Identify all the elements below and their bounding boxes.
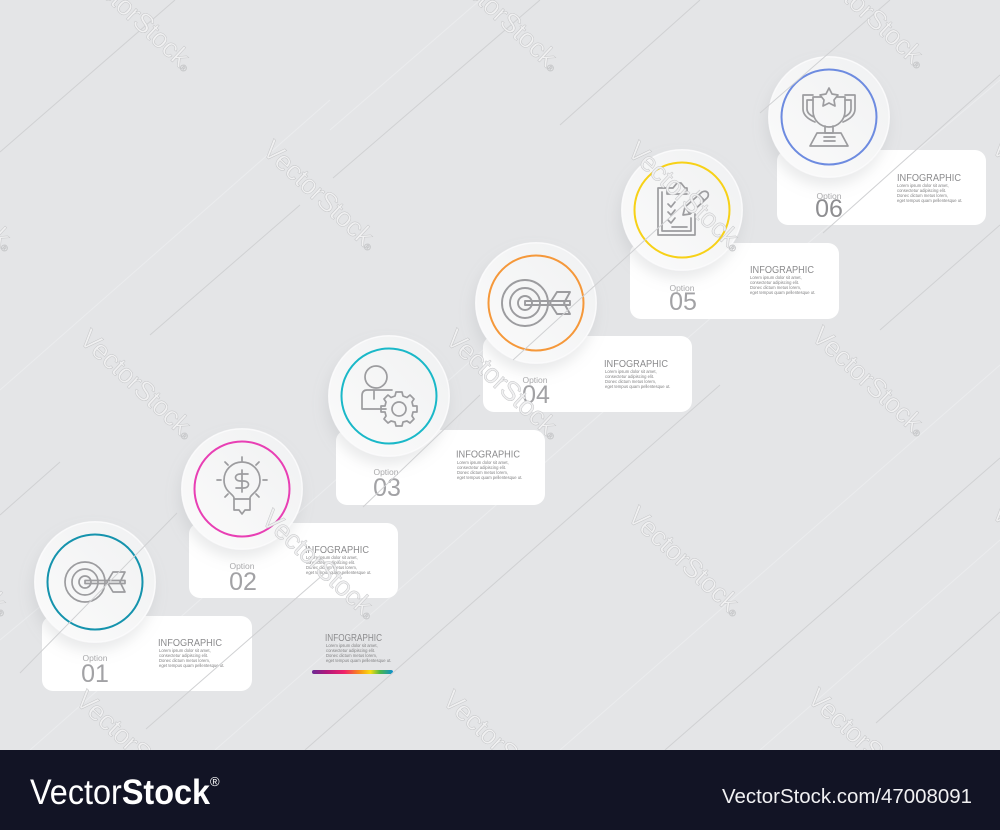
card 4: Option [522,375,548,385]
card 6: Donec dictum metus lorem, [897,193,948,198]
watermarks: VectorStock® [622,500,749,622]
card 4 [483,336,692,412]
footer bar: VectorStock [30,773,210,812]
circle 5 [621,149,743,271]
card 5: Lorem ipsum dolor sit amet, [750,275,802,280]
watermarks: VectorStock® [70,684,197,806]
card 3: consectetur adipiscing elit. [457,465,506,470]
legend: infographic text with rainbow bar [312,632,393,674]
icon: person with gear [362,366,417,426]
step 4 [475,242,692,412]
card 2: INFOGRAPHIC [305,544,369,556]
watermarks: VectorStock® [74,323,201,445]
card 6: INFOGRAPHIC [897,172,961,184]
card 5: 05 [669,288,697,316]
watermarks: VectorStock® [437,684,564,806]
card 4: INFOGRAPHIC [604,358,668,370]
card 5: eget tempus quam pellentesque ut. [750,290,815,295]
legend: infographic text with rainbow bar: Lorem ipsum dolor sit amet, [326,643,378,648]
card 1: eget tempus quam pellentesque ut. [159,663,224,668]
circle 4 [475,242,597,364]
icon: target with arrow [502,280,570,326]
card 6: Option [816,191,842,201]
card 2 [189,523,398,598]
watermarks: VectorStock® [257,134,384,256]
icon: light bulb with dollar [217,457,267,514]
legend: infographic text with rainbow bar: consectetur adipiscing elit. [326,648,375,653]
footer bar [0,750,1000,830]
card 1: INFOGRAPHIC [158,637,222,649]
card 1: Donec dictum metus lorem, [159,658,210,663]
card 5: INFOGRAPHIC [750,264,814,276]
circle 2 [181,428,303,550]
watermarks: VectorStock® [440,323,567,445]
card 5: Donec dictum metus lorem, [750,285,801,290]
circle 6 [768,56,890,178]
card 4: consectetur adipiscing elit. [605,374,654,379]
card 1: Option [82,653,108,663]
watermarks: VectorStock® [806,320,933,442]
card 3: eget tempus quam pellentesque ut. [457,475,522,480]
card 1: 01 [81,660,109,688]
card 2: Lorem ipsum dolor sit amet, [306,555,358,560]
icon: target with arrow [65,562,125,602]
footer bar: ® [210,774,220,789]
card 6: Lorem ipsum dolor sit amet, [897,183,949,188]
card 2: Option [229,561,255,571]
card 3: INFOGRAPHIC [456,448,520,460]
card 2: 02 [229,568,257,596]
watermarks: VectorStock® [622,135,749,257]
step 2 [181,428,398,598]
card 5: consectetur adipiscing elit. [750,280,799,285]
step 5 [621,149,839,319]
legend: infographic text with rainbow bar: eget tempus quam pellentesque ut. [326,658,391,663]
card 3: 03 [373,474,401,502]
circle 3 [328,335,450,457]
card 4: 04 [522,381,550,409]
card 4: Lorem ipsum dolor sit amet, [605,369,657,374]
card 2: consectetur adipiscing elit. [306,560,355,565]
card 4: eget tempus quam pellentesque ut. [605,384,670,389]
card 3: Donec dictum metus lorem, [457,470,508,475]
legend: infographic text with rainbow bar: Donec dictum metus lorem, [326,653,377,658]
step 1 [34,521,252,691]
card 1 [42,616,252,691]
watermarks: VectorStock® [256,503,383,625]
card 5: Option [669,283,695,293]
card 2: Donec dictum metus lorem, [306,565,357,570]
card 5 [630,243,839,319]
step 6 [768,56,986,225]
card 6 [777,150,986,225]
footer bar: VectorStock.com/47008091 [722,786,972,808]
card 2: eget tempus quam pellentesque ut. [306,570,371,575]
circle 1 [34,521,156,643]
card 4: Donec dictum metus lorem, [605,379,656,384]
legend: infographic text with rainbow bar: INFOGRAPHIC [325,632,382,644]
card 6: consectetur adipiscing elit. [897,188,946,193]
card 6: 06 [815,195,843,223]
card 1: consectetur adipiscing elit. [159,653,208,658]
card 3: Option [373,467,399,477]
card 3 [336,430,545,505]
card 6: eget tempus quam pellentesque ut. [897,198,962,203]
step 3 [328,335,545,505]
watermarks: VectorStock® [802,682,929,804]
icon: clipboard with pencil [658,183,708,235]
icon: trophy with star [803,88,855,146]
card 1: Lorem ipsum dolor sit amet, [159,648,211,653]
card 3: Lorem ipsum dolor sit amet, [457,460,509,465]
